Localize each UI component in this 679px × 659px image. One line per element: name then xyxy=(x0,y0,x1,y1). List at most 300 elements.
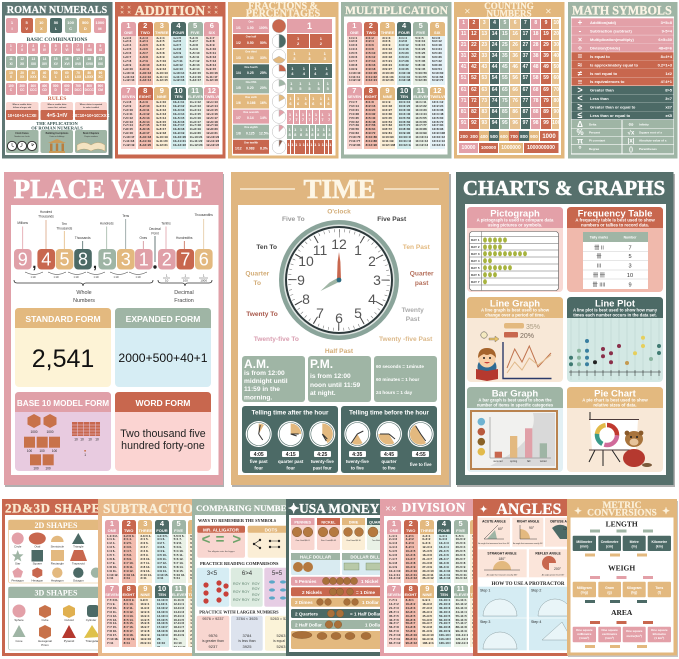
combinations grid xyxy=(6,43,107,96)
fraction value cells: 1/12 xyxy=(235,146,242,150)
fraction bars: 1 xyxy=(297,36,299,41)
title: metric conversions: CONVERSIONS xyxy=(587,508,657,518)
number grid 1 to 100 xyxy=(459,18,559,130)
symbol rows: inequality: > xyxy=(577,85,583,95)
number grid 1 to 100: 44 xyxy=(492,64,497,70)
fraction bars: 7 xyxy=(302,117,304,122)
rule boxes xyxy=(6,102,110,120)
solid shape icons xyxy=(12,604,100,639)
division tables: 12 xyxy=(473,584,481,592)
tally table: Number xyxy=(624,236,637,240)
protractor steps: Step 1 xyxy=(480,588,490,592)
bar chart on wood board: fall xyxy=(527,459,531,463)
division tables: EIGHT xyxy=(405,592,417,597)
mini clock 4:05 xyxy=(246,421,272,447)
fraction bars: 6 xyxy=(320,101,322,106)
fraction bars: 1 xyxy=(310,142,312,147)
combinations grid: XI xyxy=(9,62,12,66)
number grid 1 to 100: 37 xyxy=(523,53,528,59)
fraction bars: 1 xyxy=(294,127,296,132)
combinations grid: 2 xyxy=(21,44,23,48)
number grid 1 to 100: 29 xyxy=(543,42,549,48)
protractor steps xyxy=(478,587,579,650)
combinations grid: VII xyxy=(76,48,80,52)
number grid 1 to 100: 84 xyxy=(492,109,497,115)
multiplication tables: 5×1=5 5×2=10 5×3=15 5×4=20 5×5=25 5×6=30 5×7=35 5×8=40 5×9=45 5×10=50 5×11=55 5×12=60 xyxy=(415,36,427,82)
title: counting numbers: NUMBERS xyxy=(486,8,532,18)
number grid 1 to 100: 6 xyxy=(514,20,517,26)
subtraction tables: 8-8=0 9-8=1 10-8=2 11-8=3 12-8=4 13-8=5 14-8=6 15-8=7 16-8=8 17-8=9 18-8=10 19-8=11 xyxy=(124,598,135,645)
rule boxes: When a smaller letter xyxy=(12,103,32,106)
symbol rows: operations: Subtraction (subtract) xyxy=(590,28,632,34)
fraction bars: 1 xyxy=(317,127,319,132)
number grid 1 to 100: 59 xyxy=(543,75,549,81)
multiplication tables: 4×1=4 4×2=8 4×3=12 4×4=16 4×5=20 4×6=24 4×7=28 4×8=32 4×9=36 4×10=40 4×11=44 4×12=48 xyxy=(399,36,410,82)
shape names: Semicircle xyxy=(51,544,64,548)
solid names: Cone xyxy=(16,639,23,643)
multiplication tables: TEN xyxy=(400,94,408,99)
times-ten markers: 1000 xyxy=(200,278,207,282)
place name labels with leader lines: Hundredths xyxy=(176,236,193,240)
addition tables: 1+1=2 1+2=3 1+3=4 1+4=5 1+5=6 1+6=7 1+7=8 1+8=9 1+9=10 1+10=11 1+11=12 1+12=13 xyxy=(123,36,134,82)
box: p.m.: at night. xyxy=(310,390,336,397)
box: base 10 model form xyxy=(15,392,111,471)
number grid 1 to 100: 13 xyxy=(481,31,487,37)
subtraction tables: SIX xyxy=(192,528,198,532)
base ten blocks: 1 xyxy=(84,453,86,457)
symbol rows: other symbols: ° xyxy=(578,145,582,154)
poster: addition xyxy=(115,2,226,158)
area unit boxes: centimetre xyxy=(602,632,618,636)
fraction value cells: 20% xyxy=(260,86,267,90)
combinations grid: 1 xyxy=(10,44,12,48)
equivalence rows: 2 Dimes xyxy=(295,600,313,605)
larger number box: 5263 and 5263 xyxy=(265,616,297,651)
application boxes xyxy=(6,130,107,153)
digit tiles: 5 xyxy=(102,250,112,270)
fraction bars: 1 xyxy=(300,127,302,132)
solid names: Prism xyxy=(41,643,49,647)
rule boxes: 10+10+1+1=XII xyxy=(8,113,36,118)
clock readouts: 4:55 xyxy=(416,452,426,458)
fraction bars: 4 xyxy=(291,71,294,76)
fraction bars: 1 xyxy=(293,51,295,56)
place name labels with leader lines: Tenths xyxy=(161,222,171,226)
number grid 1 to 100: 24 xyxy=(492,42,497,48)
place name labels with leader lines: Hundreds xyxy=(100,222,114,226)
number grid 1 to 100: 33 xyxy=(481,53,487,59)
combinations grid: 19 xyxy=(99,57,102,61)
shape names: Triangle xyxy=(73,544,84,548)
addition tables: ELEVEN xyxy=(188,94,204,99)
combinations grid: X xyxy=(10,75,12,79)
length unit boxes: Kilometre xyxy=(651,540,667,544)
weight unit boxes: Kilogram xyxy=(627,586,642,590)
combinations grid: VI xyxy=(65,48,68,52)
division tables: 7÷7=1 14÷7=2 21÷7=3 28÷7=4 35÷7=5 42÷7=6 49÷7=7 56÷7=8 63÷7=9 70÷7=10 77÷7=11 84÷7=12 xyxy=(389,598,400,645)
bar chart on wood board: summer xyxy=(493,459,503,463)
symbol rows: inequality: Less than xyxy=(590,96,609,101)
poster: math symbols xyxy=(568,2,678,158)
combinations grid: LX xyxy=(65,75,69,79)
clock labels: Twenty xyxy=(402,307,424,314)
area unit boxes xyxy=(573,621,671,648)
practice box: 3 less than 5: 3<5 xyxy=(207,571,218,577)
panel: 2d shapes xyxy=(8,520,108,583)
fraction value cells: 12.5% xyxy=(259,132,269,136)
combinations grid: XII xyxy=(20,62,24,66)
fraction bars: 1 xyxy=(328,112,330,117)
number grid 1 to 100: 94 xyxy=(492,120,497,126)
box: standard form: 2,541 xyxy=(32,345,94,373)
title: division: DIVISION xyxy=(402,500,466,514)
coin panels: One Dime/$0.10 xyxy=(346,540,362,542)
poster: usa money xyxy=(286,499,396,656)
bar chart on wood board: spring xyxy=(510,459,518,463)
number grid 1 to 100: 68 xyxy=(533,87,538,93)
number grid 1 to 100: 5 xyxy=(503,20,506,26)
poster: counting numbers xyxy=(454,1,564,158)
fraction bars: 1 xyxy=(303,66,305,71)
panel: mr. alligator: > xyxy=(232,531,241,548)
solid names: Triangular xyxy=(86,639,98,643)
coin panels: Two Bits/$0.25 xyxy=(372,539,386,542)
box: p.m.: is from 12:00 xyxy=(310,373,351,380)
digit tiles: 6 xyxy=(199,250,209,270)
hundreds row: 600 xyxy=(500,134,508,139)
fraction bars: 1 xyxy=(322,142,324,147)
base ten blocks xyxy=(24,414,100,470)
equivalence rows: 2 Nickels xyxy=(302,590,322,595)
symbol rows: other symbols: Square root of x xyxy=(639,130,662,134)
area unit boxes: millimetre xyxy=(577,632,592,636)
number grid 1 to 100: 83 xyxy=(481,109,487,115)
number grid 1 to 100: 88 xyxy=(533,109,538,115)
number grid 1 to 100: 12 xyxy=(471,31,477,37)
combinations grid: 7 xyxy=(77,44,79,48)
separators: commas and decimal point: , xyxy=(93,255,97,272)
basic numeral tiles: I xyxy=(11,26,13,30)
number grid 1 to 100: 43 xyxy=(481,64,487,70)
fraction bars: 5 xyxy=(318,86,320,91)
clock xyxy=(279,220,399,340)
number grid 1 to 100: 87 xyxy=(523,109,528,115)
coin panels: Five Cents/$0.05 xyxy=(321,539,337,542)
number grid 1 to 100: 75 xyxy=(502,98,508,104)
place name labels with leader lines: Millions xyxy=(17,221,28,225)
symbol rows: other symbols: ∞ xyxy=(628,122,634,128)
symbol rows: operations: + xyxy=(578,18,583,27)
pictograph chart: DAY 4 xyxy=(471,259,480,263)
large number row: 10000 xyxy=(462,145,476,151)
title: 2d and 3d shapes: 2D&3D SHAPES xyxy=(5,500,109,516)
fraction bars: 5 xyxy=(327,86,329,91)
tally table: III xyxy=(597,264,601,270)
panel: acute angle: An angle that measures less than 90° xyxy=(478,542,510,545)
box: expanded form: EXPANDED FORM xyxy=(126,314,200,324)
addition tables: 7+1=8 7+2=9 7+3=10 7+4=11 7+5=12 7+6=13 7+7=14 7+8=15 7+9=16 7+10=17 7+11=18 7+12=19 xyxy=(123,100,134,147)
title: comparing numbers: COMPARING NUMBERS xyxy=(196,503,298,513)
combinations grid: 8 xyxy=(88,44,90,48)
base ten blocks: 1000 xyxy=(30,430,38,434)
symbol rows: operations: ÷ xyxy=(578,44,583,52)
panel: obtuse angle: 120° xyxy=(563,527,571,531)
large number row: 100000 xyxy=(481,145,497,150)
number grid 1 to 100: 22 xyxy=(471,42,477,48)
addition tables: FIVE xyxy=(191,30,200,34)
larger number box: 9576 and 9237 xyxy=(197,616,229,651)
symbol rows: inequality: x≥7 xyxy=(665,104,673,109)
practice box: 6 greater than 4 xyxy=(231,568,263,607)
symbol rows: other symbols: Δ xyxy=(577,120,583,129)
pictograph chart: DAY 5 xyxy=(471,266,480,270)
multiplication tables: SIX xyxy=(434,30,440,34)
number grid 1 to 100: 82 xyxy=(471,109,477,115)
combinations grid: XVI xyxy=(64,62,69,66)
fraction value cells: 1/8 xyxy=(236,132,241,136)
combinations grid: DC xyxy=(65,88,69,92)
subtraction tables: 9-9=0 10-9=1 11-9=2 12-9=3 13-9=4 14-9=5 15-9=6 16-9=7 17-9=8 18-9=9 19-9=10 20-9=11 xyxy=(140,598,151,645)
fraction bars: 1 xyxy=(291,142,294,147)
box: time units: 60 seconds = 1minute xyxy=(376,364,424,369)
number grid 1 to 100: 77 xyxy=(523,98,528,104)
area unit boxes: (1cm²) xyxy=(605,636,614,640)
multiplication tables: 8×1=8 8×2=16 8×3=24 8×4=32 8×5=40 8×6=48 8×7=56 8×8=64 8×9=72 8×10=80 8×11=88 8×12=96 xyxy=(366,100,377,147)
division tables: TWO xyxy=(406,528,415,532)
combinations grid: 800 xyxy=(87,84,92,88)
combinations grid: 30 xyxy=(32,71,35,75)
subtraction tables: FIVE xyxy=(174,528,183,532)
place name labels with leader lines: Thousands xyxy=(38,214,54,218)
decor: math signs: ✕ xyxy=(127,5,131,11)
pictograph chart xyxy=(470,232,558,290)
flat shape icons xyxy=(12,532,101,578)
fraction bars: 1 xyxy=(327,81,329,86)
panel: frequency table: A frequency table is best used to show xyxy=(575,218,655,222)
separators: commas and decimal point xyxy=(32,255,157,272)
reading captions: five to five xyxy=(410,462,432,467)
length unit boxes: Millimetre xyxy=(576,540,592,544)
protractor steps: Step 3 xyxy=(480,620,490,624)
larger number box: 5263 and 5263: 5263 xyxy=(277,633,286,638)
clock labels: Twenty-five To xyxy=(254,336,299,343)
panel: pictograph: Pictograph xyxy=(490,208,540,220)
equivalence rows: 2 Quarters xyxy=(295,612,318,616)
combinations grid: VIII xyxy=(87,48,92,52)
decor: cross marks: ✕ xyxy=(545,7,552,16)
fraction bars: 6 xyxy=(312,101,314,106)
number grid 1 to 100: 61 xyxy=(461,87,466,93)
panel: frequency table: numbers or tallies to record data. xyxy=(581,222,649,228)
division tables: FIVE xyxy=(456,528,465,532)
subtraction tables: 12 xyxy=(191,584,199,592)
combinations grid: 4 xyxy=(44,44,45,48)
tally table: Tally marks xyxy=(590,236,608,240)
poster: multiplication xyxy=(341,2,452,158)
fraction value cells: One fifth xyxy=(246,80,257,84)
subtraction tables: TWO xyxy=(124,528,133,532)
division tables: TWELVE xyxy=(470,592,487,597)
equivalence rows: 1 Dollar xyxy=(362,600,379,605)
larger number box: 3784 and 3925: 3784 < 3925 xyxy=(236,617,258,621)
panel: telling time after the hour: Telling time after the hour xyxy=(252,410,329,416)
large number row: 1000000 xyxy=(501,145,521,151)
fraction value cells: 1/6 xyxy=(236,101,241,105)
mini clock 4:45 xyxy=(376,421,402,447)
pictograph chart: DAY 2 xyxy=(471,245,480,249)
shape names: Heptagon xyxy=(51,578,64,582)
panel: line graph: A line graph is best used to show xyxy=(481,308,550,312)
base ten blocks: 10 xyxy=(95,438,99,442)
division tables xyxy=(387,520,487,650)
fraction bars: 1 xyxy=(320,36,322,41)
box: word form: WORD FORM xyxy=(136,398,190,408)
division tables: 7 xyxy=(392,584,396,592)
addition tables: THREE xyxy=(155,30,169,34)
area unit boxes: One square xyxy=(626,629,643,633)
panel: reflex angle: An angle greater than 180° xyxy=(542,574,565,576)
combinations grid: 15 xyxy=(54,57,57,61)
fraction bars: 7 xyxy=(295,117,298,122)
dot plot xyxy=(569,336,661,376)
panel: line graph xyxy=(467,297,563,382)
symbol rows: equality: Is equal to xyxy=(590,54,610,59)
panel: pie chart: relative sizes of data. xyxy=(593,402,637,408)
hundreds row: 400 xyxy=(480,134,488,139)
panel: line graph: change over a period of time. xyxy=(485,312,545,318)
base ten blocks: 10 xyxy=(88,438,92,442)
fraction bars: 7 xyxy=(315,117,317,122)
solid names: Cylinder xyxy=(86,618,96,622)
hundreds row xyxy=(459,131,558,141)
title: roman numerals: ROMAN NUMERALS xyxy=(7,5,108,16)
base ten blocks: 100 xyxy=(45,466,51,470)
number grid 1 to 100: 40 xyxy=(554,53,559,59)
panel: bar graph xyxy=(467,387,563,472)
brace: decimal fraction: Decimal xyxy=(174,290,194,296)
addition tables: 8 xyxy=(143,86,147,94)
base ten blocks: 100 xyxy=(39,449,45,453)
subtraction tables xyxy=(105,520,205,650)
tally table: 卌 IIII xyxy=(593,282,605,288)
fraction bars: 1 xyxy=(299,81,302,86)
fraction bars: 4 xyxy=(326,71,328,76)
number grid 1 to 100: 34 xyxy=(492,53,497,59)
legend xyxy=(504,323,540,340)
combinations grid: I xyxy=(10,48,11,52)
title: fractions and percentages xyxy=(246,1,321,20)
fraction bars: 1 xyxy=(303,142,305,147)
symbol rows: equality: Is approximately equal to xyxy=(590,62,639,67)
combinations grid: II xyxy=(21,48,23,52)
fraction bars: 1 xyxy=(314,142,316,147)
number grid 1 to 100: 63 xyxy=(481,87,487,93)
combinations grid: XL xyxy=(42,75,47,79)
combinations grid: 3 xyxy=(32,44,34,48)
digit tiles: 5 xyxy=(59,250,70,270)
fraction value cells: 0.166 xyxy=(247,101,256,105)
number grid 1 to 100: 89 xyxy=(543,109,549,115)
fraction value cells: 0.33 xyxy=(247,56,254,60)
larger number box: 5263 and 5263: is equal to xyxy=(273,639,289,643)
number grid 1 to 100: 16 xyxy=(512,31,518,37)
number grid 1 to 100: 23 xyxy=(481,42,487,48)
addition tables: ONE xyxy=(124,30,133,34)
icon: reading boy xyxy=(476,332,499,381)
subtraction tables: 8 xyxy=(127,584,131,592)
symbol rows: other symbols: Absolute value of x xyxy=(639,138,667,142)
fraction bars: 7 xyxy=(308,117,311,122)
hundreds row: 700 xyxy=(510,134,518,139)
times-ten markers: ×10 xyxy=(113,275,119,279)
number grid 1 to 100: 53 xyxy=(481,75,487,81)
weight unit boxes: (g) xyxy=(607,590,612,594)
number grid 1 to 100: 38 xyxy=(533,53,538,59)
panel: reflex angle: REFLEX ANGLE xyxy=(535,552,561,556)
combinations grid: LXXX xyxy=(85,75,93,79)
subtraction tables: ONE xyxy=(108,528,116,532)
application boxes: Clock Faces xyxy=(15,133,29,135)
addition tables: 8+1=9 8+2=10 8+3=11 8+4=12 8+5=13 8+6=14 8+7=15 8+8=16 8+9=17 8+10=18 8+11=19 8+12=20 xyxy=(140,100,151,147)
number grid 1 to 100: 50 xyxy=(554,64,559,70)
hundreds row: 900 xyxy=(530,134,538,139)
subtraction tables: 5-5=0 6-5=1 7-5=2 8-5=3 9-5=4 10-5=5 11-5=6 12-5=7 13-5=8 14-5=9 15-5=10 16-5=11 xyxy=(174,534,185,580)
symbol rows: inequality xyxy=(572,85,674,120)
fraction bars: 7 xyxy=(289,117,291,122)
area unit boxes: One square xyxy=(651,628,668,632)
multiplication tables: NINE xyxy=(383,94,392,99)
symbol rows: inequality: Greater than xyxy=(590,88,614,93)
area unit boxes: metre(1m²) xyxy=(626,634,642,638)
mini clock 4:25 xyxy=(309,421,335,447)
panel: straight angle xyxy=(478,549,527,577)
clock: 7 xyxy=(316,305,324,321)
clock labels xyxy=(245,208,434,355)
reading captions: four xyxy=(286,466,295,470)
box: a.m.: midnight until xyxy=(244,378,288,385)
panel: telling time before the hour xyxy=(341,406,437,473)
title: addition: ADDITION xyxy=(135,3,205,18)
number grid 1 to 100: 58 xyxy=(533,75,538,81)
solid names: Pyramid xyxy=(64,639,75,643)
coin panels: PENNIES xyxy=(294,520,312,524)
box: a.m.: A.M. xyxy=(244,357,269,371)
poster: angles xyxy=(473,499,583,656)
clock labels: Quarter xyxy=(245,270,270,278)
poster: comparing numbers xyxy=(192,499,302,656)
heading: ways to remember: WAYS TO REMEMBER THE SYMBOLS xyxy=(198,518,277,523)
panel: pie chart xyxy=(567,387,663,472)
subtraction tables: ELEVEN xyxy=(172,592,188,597)
fraction bars: 1 xyxy=(315,112,317,117)
multiplication tables: FOUR xyxy=(398,30,410,34)
division tables: 3÷3=1 6÷3=2 9÷3=3 12÷3=4 15÷3=5 18÷3=6 21÷3=7 24÷3=8 27÷3=9 30÷3=10 33÷3=11 36÷3=12 xyxy=(422,534,434,580)
symbol rows: equality: 4≡4+1 xyxy=(661,79,673,84)
combinations grid: 14 xyxy=(43,57,46,61)
title: fractions and percentages: PERCENTAGES xyxy=(246,8,321,20)
fraction bars: 1 xyxy=(306,142,309,147)
poster: subtraction xyxy=(98,499,208,656)
panel: dollar bill: DOLLAR BILL xyxy=(350,554,380,560)
hundreds row: 500 xyxy=(490,134,498,139)
combinations grid: LXX xyxy=(75,75,81,79)
coin panels: DIME xyxy=(349,520,359,524)
mini clock 4:55 xyxy=(408,421,434,447)
practice box: 6 greater than 4: ROY ROY xyxy=(233,590,250,594)
clock hands xyxy=(320,252,341,291)
pictograph chart: DAY 7 xyxy=(471,280,480,284)
coin strip xyxy=(292,577,371,640)
